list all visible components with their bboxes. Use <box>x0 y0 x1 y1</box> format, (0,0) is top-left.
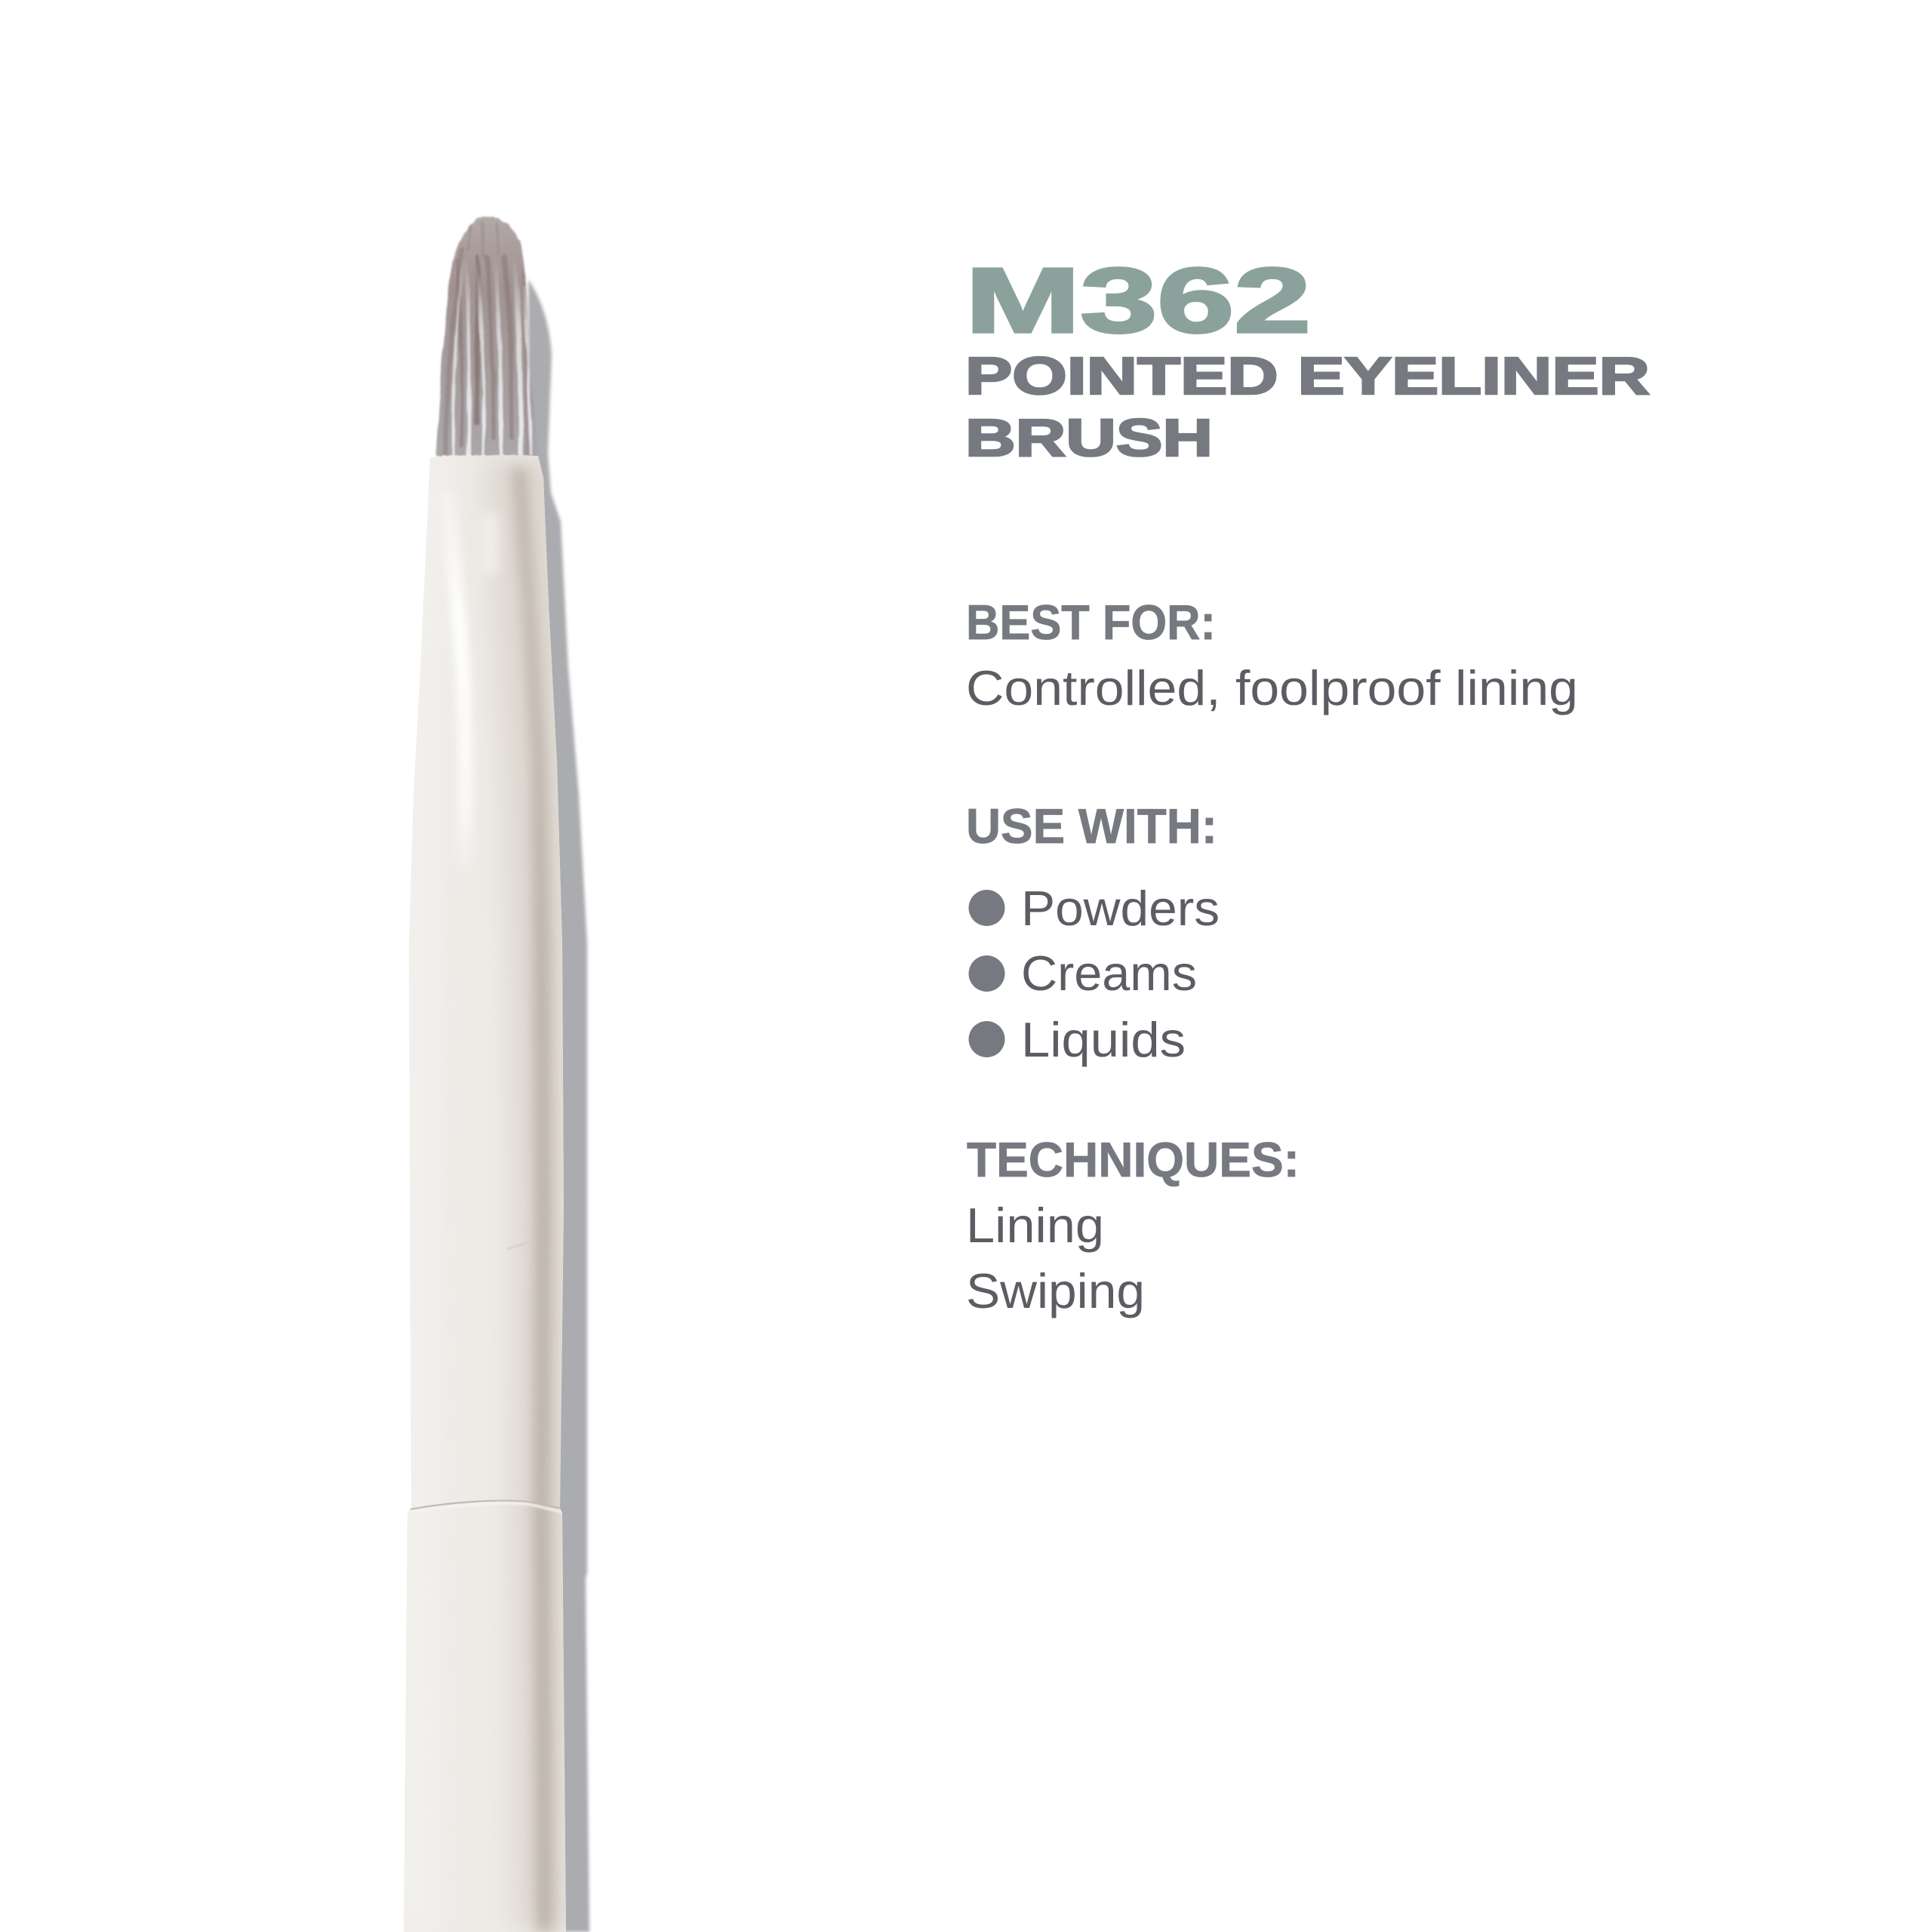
handle left-side glow <box>392 453 445 1932</box>
handle highlight <box>448 491 465 875</box>
bristles <box>435 216 536 457</box>
handle scuff <box>507 1243 527 1249</box>
handle right-side shading <box>483 456 574 1932</box>
bullet list: Creams <box>1021 946 1197 1001</box>
techniques block: TECHNIQUES: <box>967 1132 1300 1187</box>
best for block <box>966 595 1578 715</box>
bullet list: Powders <box>1021 881 1220 936</box>
brush illustration <box>392 211 589 1932</box>
ferrule seam <box>410 1500 562 1509</box>
techniques block: Lining <box>966 1198 1104 1253</box>
use with block <box>966 798 1220 1067</box>
bullet list: Liquids <box>1021 1012 1186 1067</box>
model number: M362 <box>965 249 1311 352</box>
handle <box>404 455 566 1932</box>
product name: BRUSH <box>965 408 1213 467</box>
product name <box>965 346 1650 467</box>
product name: POINTED EYELINER <box>965 346 1650 405</box>
best for block: Controlled, foolproof lining <box>966 660 1578 715</box>
use with block: USE WITH: <box>966 798 1217 854</box>
techniques block: Swiping <box>966 1263 1145 1318</box>
brush cast shadow <box>528 279 589 1932</box>
best for block: BEST FOR: <box>966 595 1216 650</box>
title <box>965 249 1650 467</box>
bullet list <box>969 881 1220 1067</box>
techniques block <box>966 1132 1300 1318</box>
